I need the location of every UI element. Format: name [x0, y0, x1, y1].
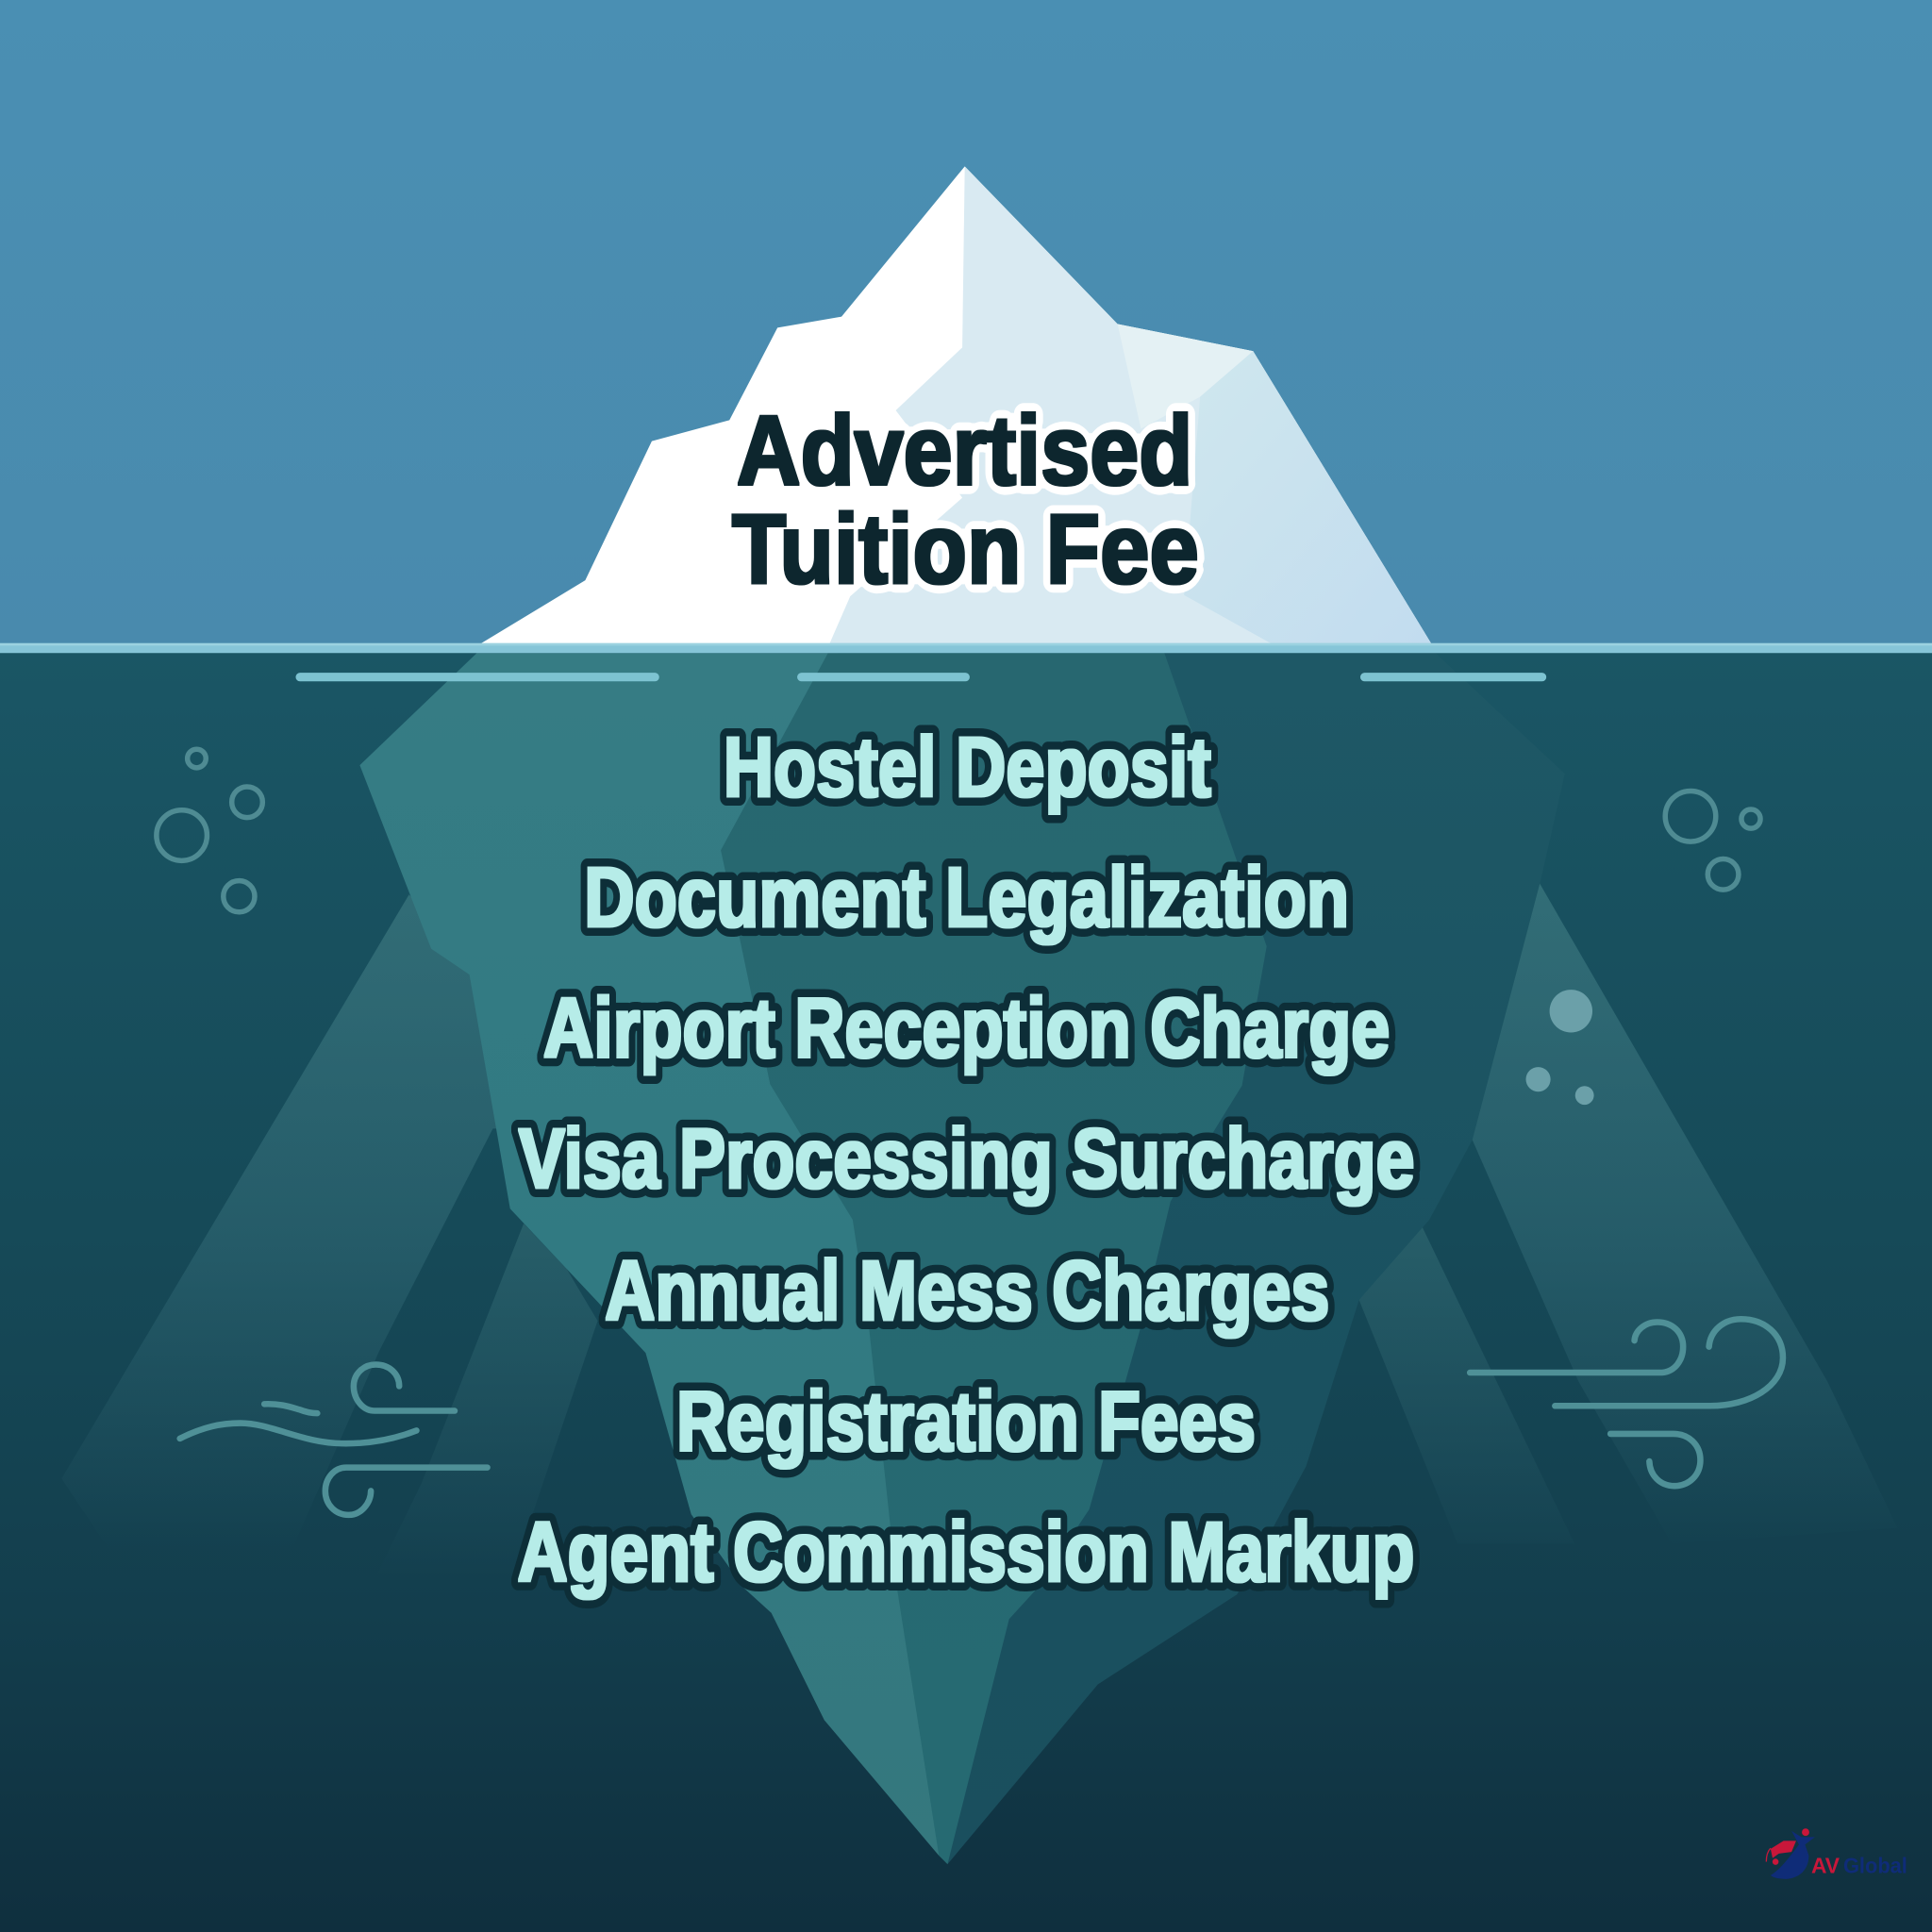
submerged iceberg: light left facet	[359, 653, 939, 1856]
bubbles upper left	[157, 749, 262, 912]
solid bubbles right	[1526, 990, 1594, 1105]
fee: hostel deposit: Hostel Deposit	[724, 720, 1211, 815]
fee: registration fees: Registration Fees	[676, 1374, 1256, 1469]
title: advertised tuition fee	[732, 395, 1199, 605]
fee: document legalization: Document Legalization	[584, 850, 1349, 945]
logo: AV Global: AV	[1811, 1853, 1840, 1877]
waterline dashes	[295, 673, 1546, 681]
submerged iceberg	[359, 653, 1565, 1864]
wind icon right	[1470, 1319, 1783, 1486]
bubbles upper right	[1665, 791, 1760, 890]
distant underwater mountains	[61, 882, 1897, 1626]
iceberg highlight facet	[1118, 325, 1253, 429]
fee: visa processing surcharge: Visa Processing Surcharge	[519, 1111, 1414, 1207]
hidden fee list	[518, 720, 1414, 1600]
ocean background	[0, 648, 1932, 1932]
iceberg white base	[479, 166, 1432, 644]
logo: AV Global	[1766, 1828, 1907, 1879]
iceberg above water	[479, 166, 1432, 644]
iceberg right facet	[1184, 351, 1432, 644]
submerged iceberg: central facet	[721, 653, 1267, 1864]
fee: agent commission markup: Agent Commission Markup	[518, 1505, 1414, 1600]
fee: airport reception charge: Airport Reception Charge	[543, 981, 1390, 1076]
sky background	[0, 0, 1932, 648]
title: advertised tuition fee: Advertised	[737, 395, 1192, 506]
logo wordmark: Global: Global	[1843, 1853, 1907, 1877]
waterline	[0, 643, 1932, 653]
logo icon: globe and figure	[1766, 1828, 1815, 1879]
title: advertised tuition fee: Tuition Fee	[732, 494, 1199, 605]
submerged iceberg: dark right facet	[947, 653, 1565, 1864]
iceberg shaded facet	[829, 166, 1432, 644]
fee: annual mess charges: Annual Mess Charges	[605, 1243, 1329, 1339]
wind icon left	[180, 1365, 488, 1515]
